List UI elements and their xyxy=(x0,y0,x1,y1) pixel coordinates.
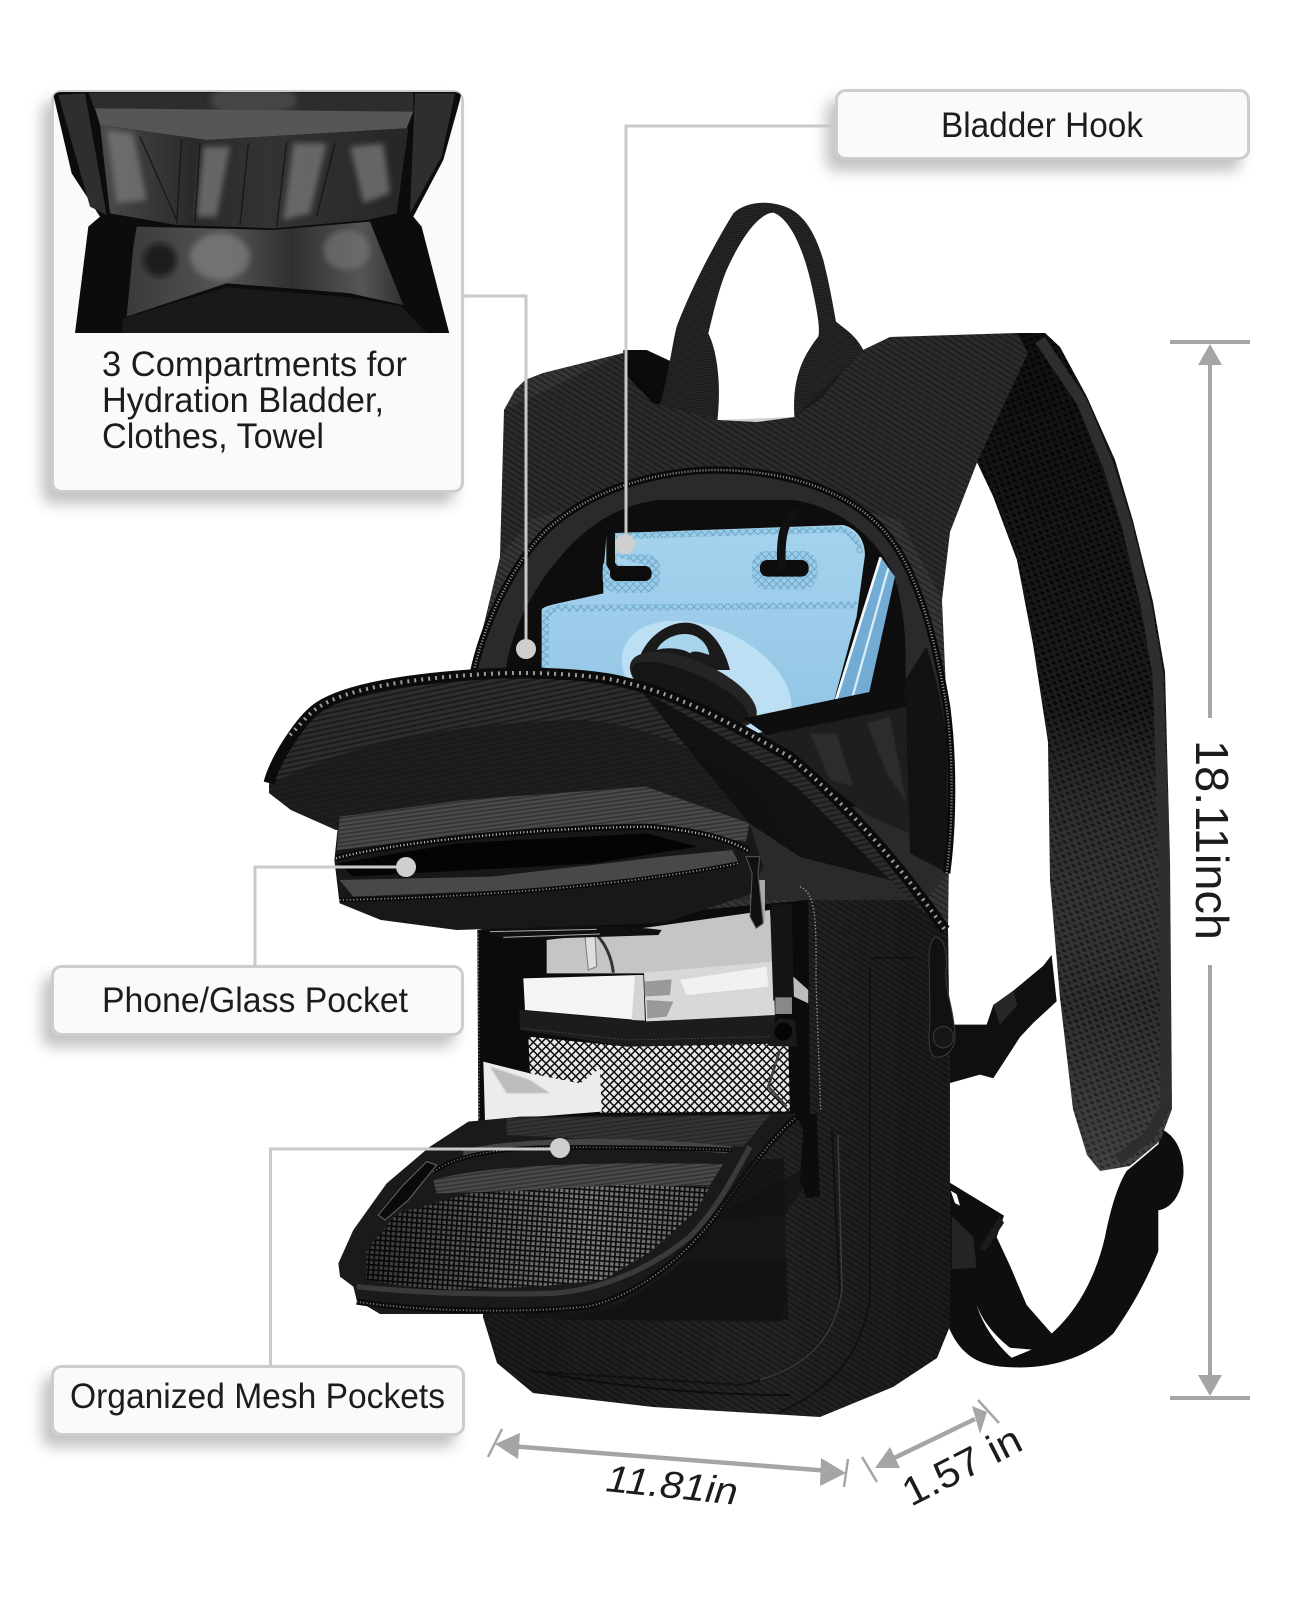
mesh pocket xyxy=(528,1037,790,1113)
webbing and zipper slider xyxy=(770,904,794,1001)
compartments caption: Clothes, Towel xyxy=(102,417,324,456)
organized mesh front flap xyxy=(338,1113,820,1320)
main front flap xyxy=(269,673,947,934)
leader line: bladder hook xyxy=(615,126,836,554)
panel: organized mesh pockets: Organized Mesh Pockets xyxy=(70,1377,445,1416)
depth label: 1.57 in xyxy=(895,1418,1029,1515)
hydration compartment opening xyxy=(473,470,952,900)
mesh panel xyxy=(367,1185,710,1290)
backpack illustration xyxy=(269,203,1184,1417)
webbing rows xyxy=(553,1158,788,1320)
panel: bladder hook: Bladder Hook xyxy=(941,106,1143,145)
compartments caption xyxy=(102,345,407,456)
white charger xyxy=(523,975,644,1021)
compartments caption: 3 Compartments for xyxy=(102,345,407,384)
zip bag xyxy=(644,962,775,1021)
leader line: compartments xyxy=(463,296,536,659)
panel: phone glass pocket: Phone/Glass Pocket xyxy=(102,981,408,1020)
dimension: height xyxy=(1170,340,1250,1400)
lower shoulder strap loop xyxy=(948,1130,1184,1367)
compartments caption: Hydration Bladder, xyxy=(102,381,384,420)
inset photo of compartments xyxy=(53,83,462,333)
elastic band xyxy=(519,1010,775,1047)
dimension: width xyxy=(488,1429,848,1514)
bladder cap xyxy=(602,595,811,771)
water bladder xyxy=(542,513,895,717)
panel: phone glass pocket xyxy=(52,966,462,1034)
panel: organized mesh pockets xyxy=(52,1366,464,1434)
compartment interior xyxy=(505,500,906,807)
top carry handle xyxy=(623,203,863,427)
main back panel xyxy=(473,333,1028,1080)
zippered pocket xyxy=(463,1139,733,1157)
grey tab under pocket xyxy=(483,926,662,940)
folded towel xyxy=(547,910,773,973)
small zip pocket under flap xyxy=(334,787,763,930)
height label: 18.11inch xyxy=(1186,740,1238,940)
sternum buckle strap xyxy=(948,955,1057,1084)
panel: compartments inset xyxy=(52,83,462,492)
flap rim and zipper xyxy=(357,1147,750,1294)
lower body xyxy=(483,850,950,1417)
leader line: mesh pockets xyxy=(270,1138,570,1366)
plastic pouch xyxy=(483,1062,602,1121)
leader line: phone pocket xyxy=(255,857,416,966)
side elastic pocket xyxy=(743,685,910,833)
dark band beside pocket xyxy=(905,647,948,873)
inner compartment contents xyxy=(477,880,821,1122)
zipper arch xyxy=(473,470,952,873)
padded shoulder strap xyxy=(975,333,1172,1171)
dimension: depth xyxy=(862,1400,1029,1515)
side zipper pull xyxy=(929,937,955,1057)
width label: 11.81in xyxy=(604,1458,740,1514)
panel: bladder hook xyxy=(836,90,1248,158)
flap zipper pull xyxy=(378,1162,437,1220)
